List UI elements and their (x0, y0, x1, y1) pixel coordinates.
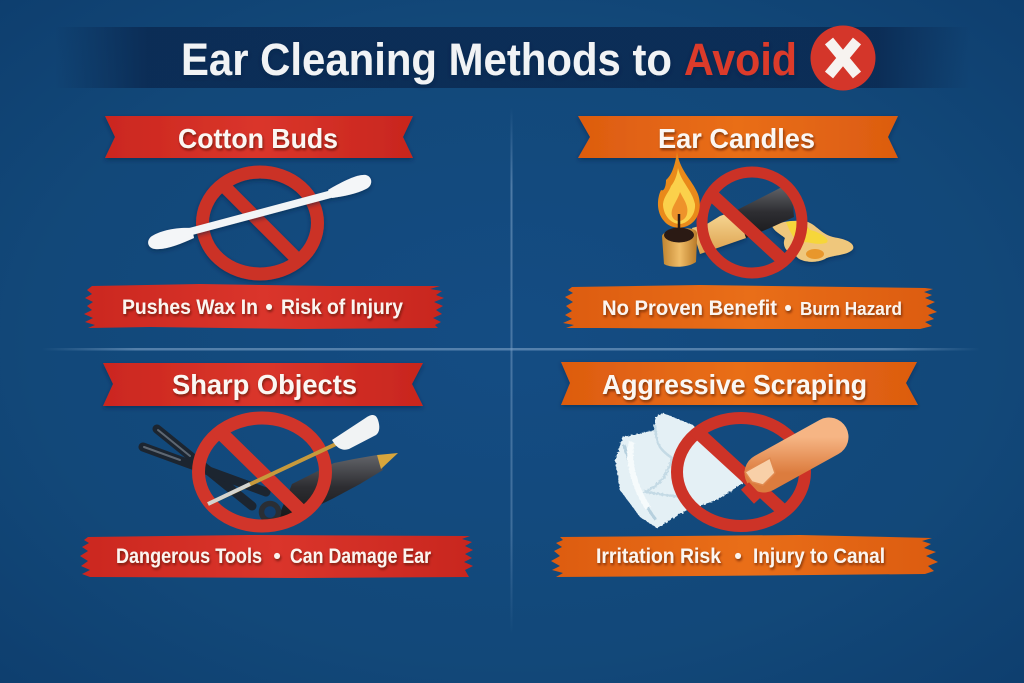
icon: cotton bud with prohibition sign (148, 172, 371, 274)
caption bar: sharp objects: Dangerous Tools (116, 545, 262, 568)
caption bar: aggressive scraping (551, 535, 938, 577)
caption bar: aggressive scraping: • (734, 545, 742, 568)
caption bar: cotton buds (84, 284, 444, 329)
caption bar: sharp objects: Can Damage Ear (290, 545, 431, 568)
icon: towel and fingernail with prohibition sign (615, 413, 829, 528)
swab stick (208, 444, 336, 504)
banner: sharp objects (103, 363, 423, 406)
caption bar: cotton buds: Pushes Wax In (122, 296, 258, 319)
panel: sharp objects (80, 363, 473, 578)
icon: sharp tools with prohibition sign (143, 415, 398, 526)
panel: cotton buds (84, 116, 444, 329)
finger (764, 437, 829, 473)
caption bar: aggressive scraping: Injury to Canal (753, 545, 885, 568)
banner: aggressive scraping (561, 362, 918, 405)
banner: aggressive scraping: Aggressive Scraping (602, 369, 867, 400)
caption bar: cotton buds: Risk of Injury (281, 296, 403, 319)
panel: ear candles (563, 116, 937, 329)
caption bar: ear candles (563, 285, 937, 329)
panel: aggressive scraping (551, 362, 938, 577)
candle tube (692, 210, 746, 254)
icon: red X badge (810, 26, 876, 90)
caption bar: sharp objects (80, 535, 473, 578)
banner: ear candles: Ear Candles (658, 123, 815, 154)
banner: cotton buds: Cotton Buds (178, 123, 338, 154)
title text: Ear Cleaning Methods to (181, 34, 672, 85)
caption bar: ear candles: No Proven Benefit (602, 297, 777, 320)
caption bar: ear candles: • (784, 297, 792, 320)
towel (615, 413, 743, 528)
title text: Avoid (684, 34, 797, 85)
tweezers (143, 429, 266, 506)
icon: ear candle with prohibition sign (658, 152, 853, 273)
caption bar: cotton buds: • (265, 296, 273, 319)
banner: sharp objects: Sharp Objects (172, 369, 357, 400)
title bar (55, 26, 970, 90)
banner: cotton buds (105, 116, 413, 158)
candle cup (662, 228, 697, 267)
wax drips (772, 221, 853, 262)
flame (658, 152, 700, 228)
caption bar: sharp objects: • (273, 545, 281, 568)
banner: ear candles (578, 116, 898, 158)
pen (278, 455, 383, 518)
caption bar: aggressive scraping: Irritation Risk (596, 545, 721, 568)
caption bar: ear candles: Burn Hazard (800, 298, 902, 319)
